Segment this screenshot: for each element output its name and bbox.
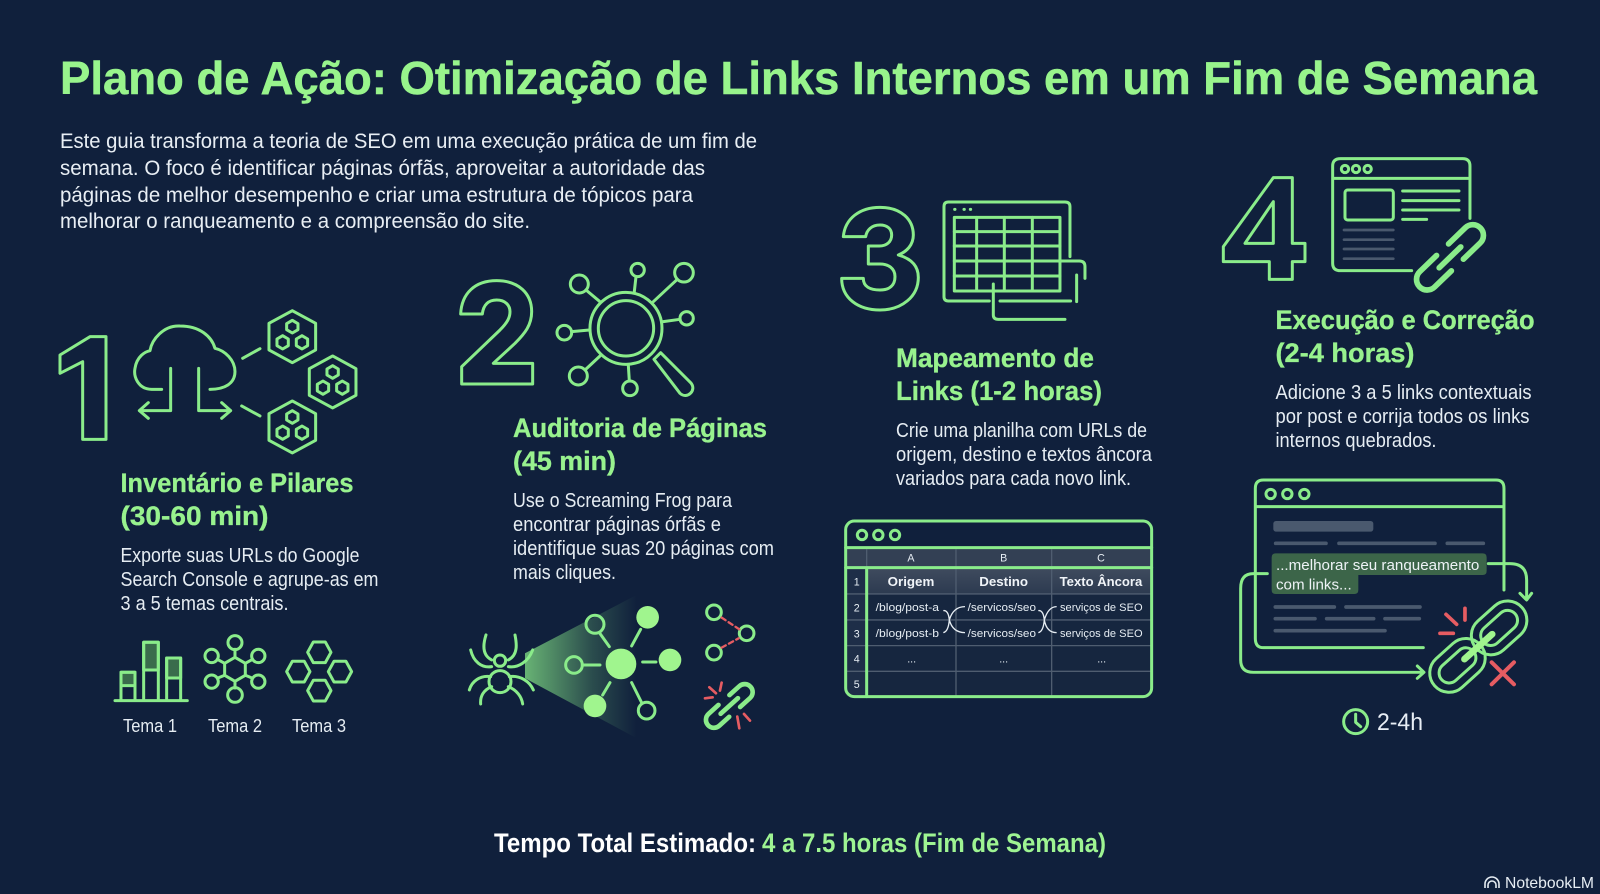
table: link mapping spreadsheet: /servicos/seo	[968, 628, 1036, 640]
text: step 1 description: 3 a 5 temas centrais.	[120, 593, 288, 615]
table: link mapping spreadsheet: 4	[854, 654, 860, 666]
icon: spreadsheet	[944, 202, 1085, 319]
text: step 4 description: por post e corrija todos os links	[1276, 406, 1530, 428]
table: link mapping spreadsheet: ...	[999, 654, 1008, 666]
table: link mapping spreadsheet: B	[1000, 553, 1007, 565]
number 1	[60, 337, 106, 439]
table: link mapping spreadsheet: Origem	[888, 574, 934, 589]
text: step 1 description: Search Console e agrupe-as em	[120, 569, 378, 591]
icon: broken chain with red marks	[1422, 593, 1535, 700]
heading: step 2	[513, 413, 767, 476]
table: link mapping spreadsheet: Destino	[979, 574, 1028, 589]
text: step 2 description: mais cliques.	[513, 562, 616, 584]
icon: web page with chain link	[1333, 159, 1488, 294]
icon: orphan nodes with red dashed links	[707, 605, 754, 660]
table: link mapping spreadsheet: A	[907, 553, 915, 565]
footer: total estimated time: Tempo Total Estimado:	[494, 828, 756, 858]
table: link mapping spreadsheet: 1	[854, 576, 860, 588]
heading: step 3: Mapeamento de	[896, 343, 1094, 373]
labels: temas: Tema 2	[208, 716, 262, 736]
table: link mapping spreadsheet: Texto Âncora	[1060, 574, 1143, 589]
icon: tema 1 bar chart	[115, 642, 187, 701]
footer: total estimated time	[494, 828, 1106, 858]
table: link mapping spreadsheet: /blog/post-a	[876, 602, 940, 614]
heading: step 1	[120, 468, 354, 531]
icon: spider crawling beam and nodes	[469, 595, 681, 738]
illustration: browser with highlighted anchor text: com links...	[1276, 577, 1352, 593]
icon: tema 2 network	[205, 636, 265, 702]
text: step 2 description: encontrar páginas órfãs e	[513, 514, 721, 536]
number 2	[461, 281, 533, 384]
labels: temas: Tema 3	[292, 716, 346, 736]
table: link mapping spreadsheet: C	[1097, 553, 1105, 565]
intro text block: páginas de melhor desempenho e criar uma estrutura de tópicos para	[60, 183, 693, 207]
heading: step 1: Inventário e Pilares	[120, 468, 354, 498]
table: link mapping spreadsheet	[846, 521, 1152, 697]
table: link mapping spreadsheet: /blog/post-b	[876, 628, 939, 640]
number 4	[1223, 178, 1305, 279]
panel: step 4 execution	[1223, 159, 1535, 736]
heading: step 4: (2-4 horas)	[1276, 338, 1414, 368]
icon: broken chain link	[703, 681, 756, 731]
text: step 2 description: Use o Screaming Frog para	[513, 490, 733, 512]
panel: step 3 mapping	[842, 202, 1153, 697]
table: link mapping spreadsheet: ...	[907, 654, 916, 666]
title: Plano de Ação: Otimização de Links Internos em um Fim de Semana	[60, 52, 1537, 104]
intro text block: semana. O foco é identificar páginas órfãs, aproveitar a autoridade das	[60, 156, 705, 180]
icon: magnifier with nodes	[557, 263, 693, 396]
labels: temas: Tema 1	[123, 716, 177, 736]
icon: clock	[1344, 710, 1368, 734]
illustration: browser with highlighted anchor text	[1241, 480, 1532, 678]
watermark: NotebookLM: NotebookLM	[1505, 875, 1594, 892]
heading: step 3: Links (1-2 horas)	[896, 376, 1102, 406]
text: step 4 description: internos quebrados.	[1276, 430, 1436, 452]
text: step 3 description: variados para cada novo link.	[896, 468, 1131, 490]
table: link mapping spreadsheet: /servicos/seo	[968, 602, 1036, 614]
table: link mapping spreadsheet: 5	[854, 679, 860, 691]
heading: step 4: Execução e Correção	[1276, 305, 1534, 335]
heading: step 4	[1276, 305, 1534, 368]
labels: temas	[123, 716, 346, 736]
intro text block: melhorar o ranqueamento e a compreensão do site.	[60, 209, 530, 233]
heading: step 3	[896, 343, 1102, 406]
text: step 2 description	[513, 490, 774, 584]
text: step 1 description: Exporte suas URLs do Google	[120, 545, 360, 567]
heading: step 2: (45 min)	[513, 446, 616, 476]
number 3	[842, 207, 918, 310]
text: step 2 description: identifique suas 20 páginas com	[513, 538, 774, 560]
panel: step 1 inventory	[60, 311, 379, 736]
text: step 1 description	[120, 545, 378, 615]
footer: total estimated time: 4 a 7.5 horas (Fim de Semana)	[762, 828, 1106, 858]
label: time 2-4h: 2-4h	[1377, 709, 1423, 736]
panel: step 2 audit	[461, 263, 774, 738]
heading: step 1: (30-60 min)	[120, 501, 268, 531]
table: link mapping spreadsheet: 2	[854, 602, 860, 614]
icon: cloud with arrows and topic hexagons	[135, 311, 356, 453]
icon: tema 3 hexagons	[287, 642, 352, 701]
table: link mapping spreadsheet: ...	[1097, 654, 1106, 666]
table: link mapping spreadsheet: 3	[854, 628, 860, 640]
intro text block	[60, 129, 757, 233]
heading: step 2: Auditoria de Páginas	[513, 413, 767, 443]
text: step 4 description: Adicione 3 a 5 links contextuais	[1276, 382, 1532, 404]
text: step 4 description	[1276, 382, 1532, 452]
table: link mapping spreadsheet: serviços de SEO	[1060, 602, 1143, 614]
table: link mapping spreadsheet: serviços de SEO	[1060, 628, 1143, 640]
intro text block: Este guia transforma a teoria de SEO em uma execução prática de um fim de	[60, 129, 757, 153]
text: step 3 description	[896, 420, 1153, 490]
illustration: browser with highlighted anchor text: ...melhorar seu ranqueamento	[1276, 558, 1479, 574]
text: step 3 description: Crie uma planilha com URLs de	[896, 420, 1147, 442]
text: step 3 description: origem, destino e textos âncora	[896, 444, 1153, 466]
